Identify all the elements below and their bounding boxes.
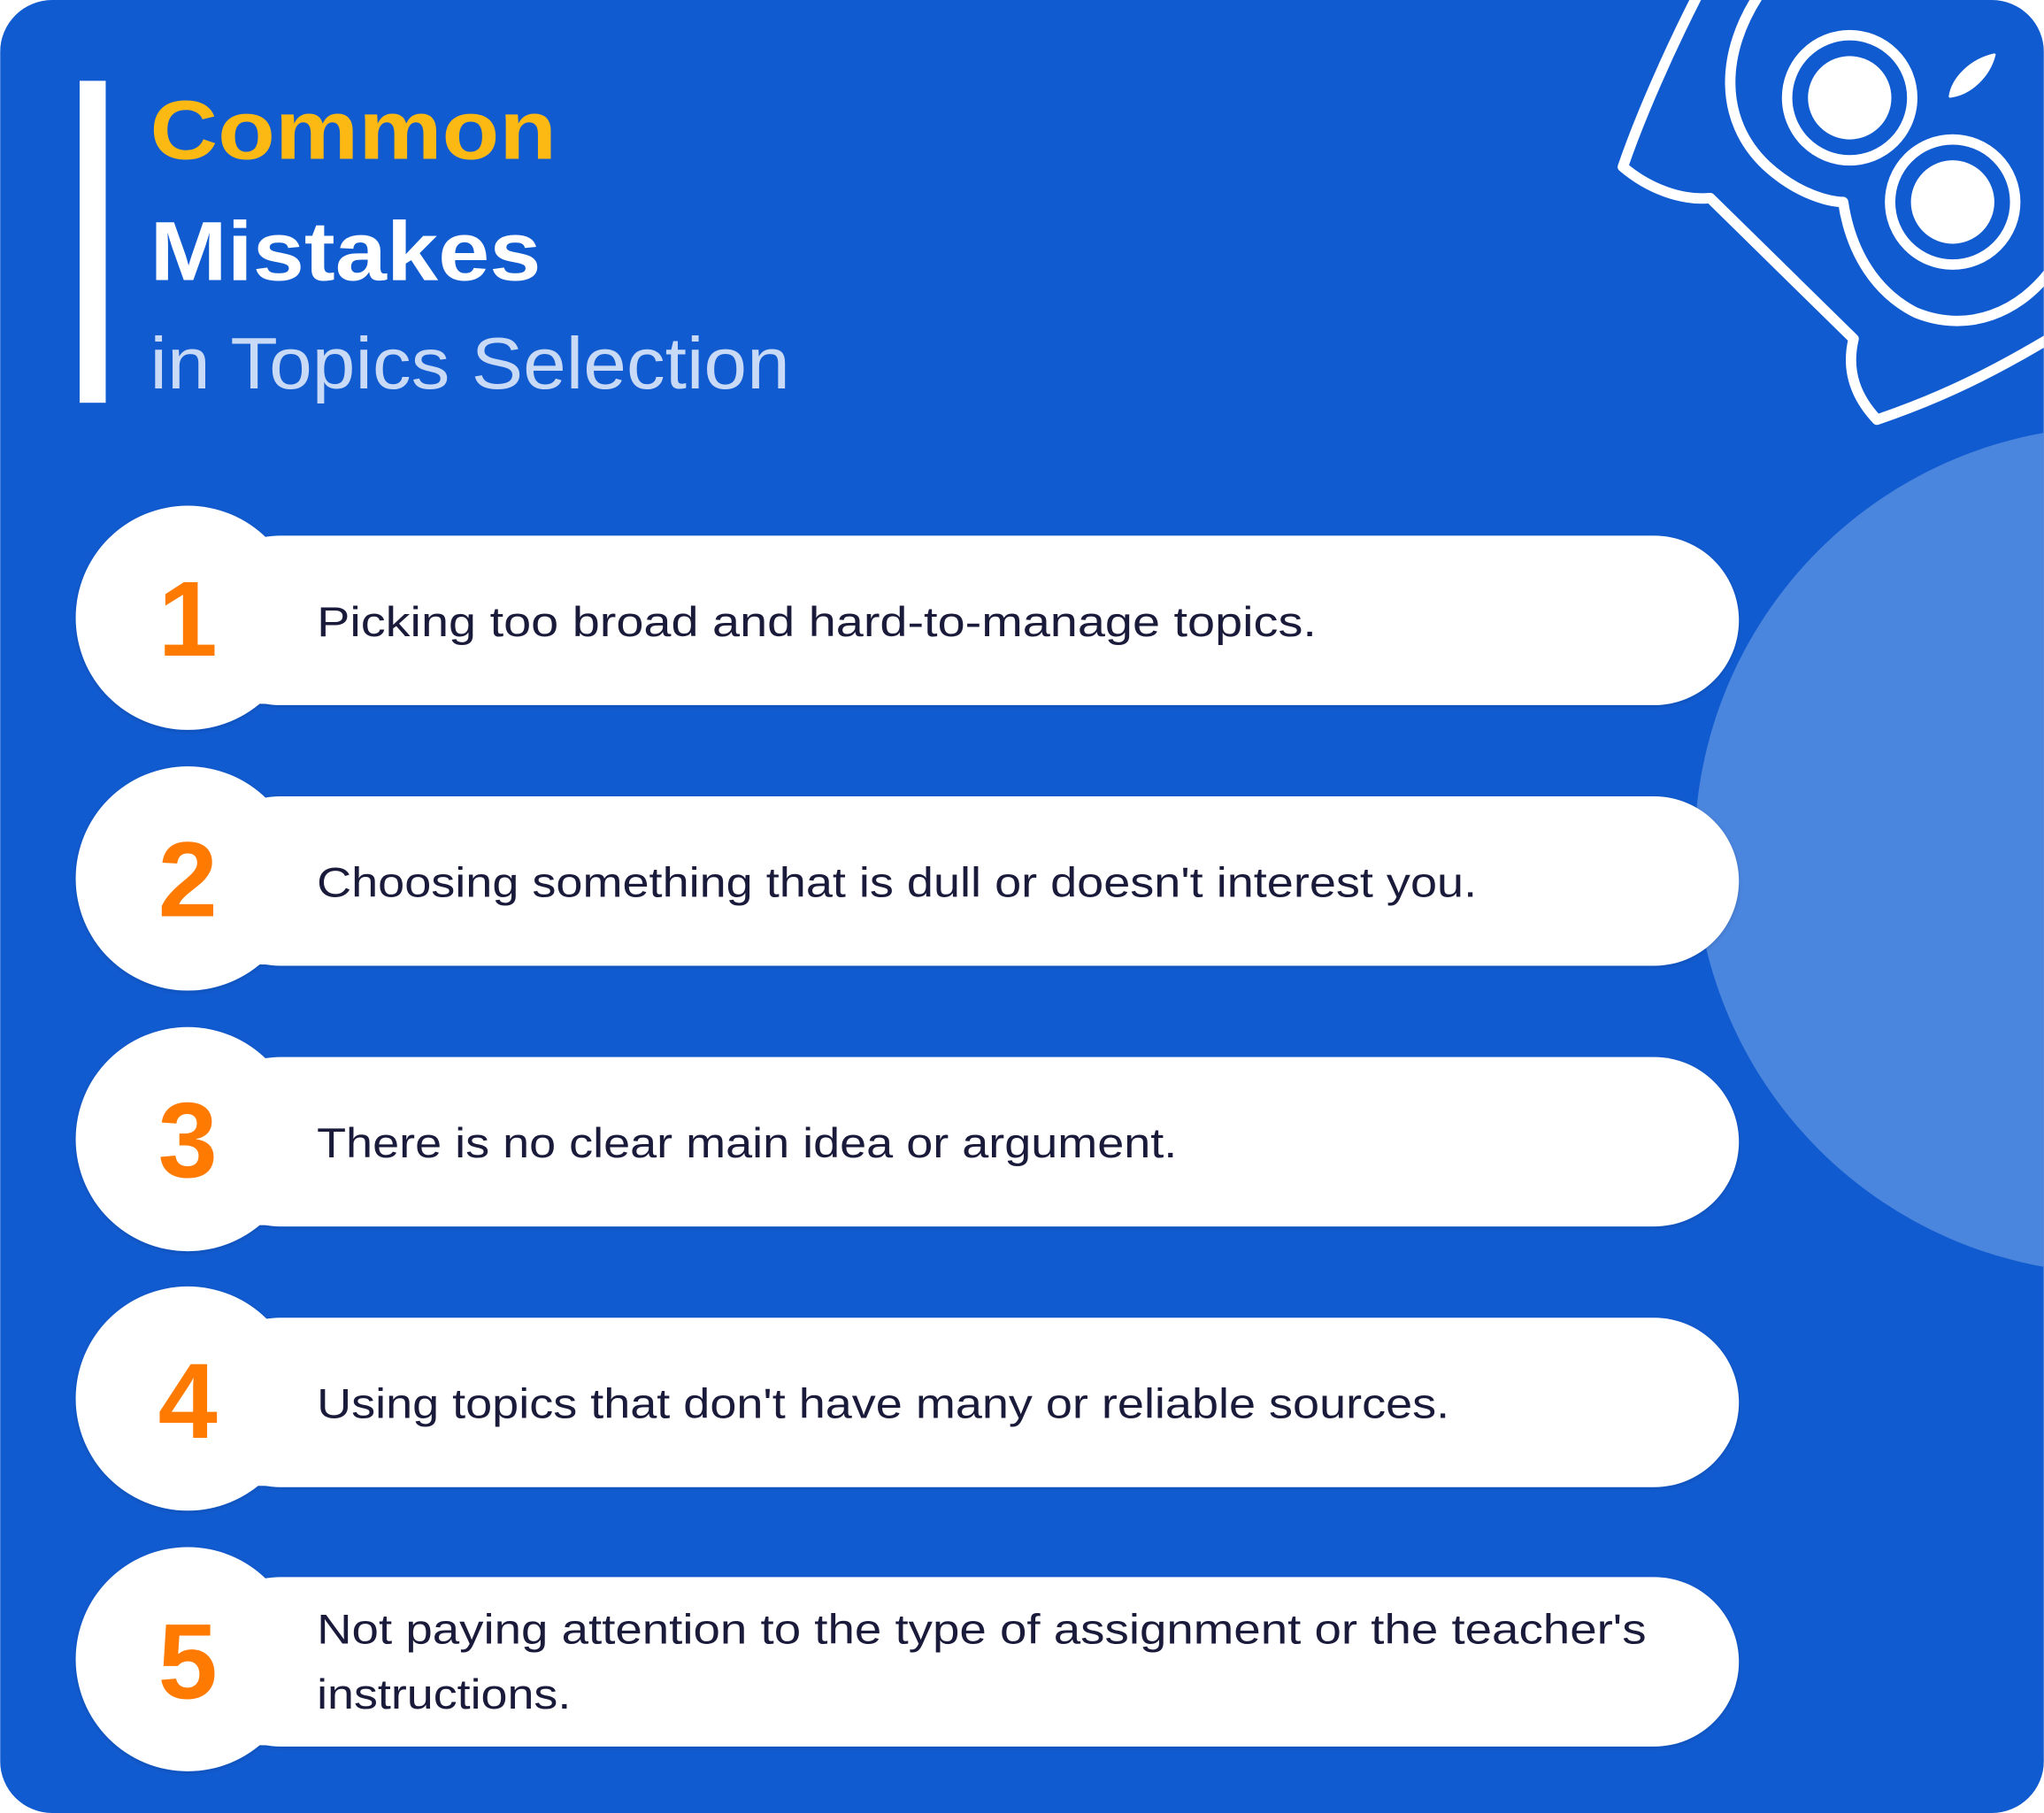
item 3: There is no clear main idea or argument. [317, 1119, 1177, 1166]
item 4: Using topics that don't have many or reliable sources. [317, 1380, 1449, 1427]
item 3: 3 [158, 1080, 218, 1200]
icon: game controller [1623, 0, 2044, 419]
item 1: 1 [158, 559, 218, 679]
decorative large circle [1694, 426, 2044, 1273]
title: in Topics Selection [150, 323, 790, 404]
item 1: Picking too broad and hard-to-manage topics. [317, 598, 1317, 645]
item 4 [76, 1287, 1739, 1510]
title: Mistakes [150, 205, 541, 298]
item 5: instructions. [317, 1671, 571, 1717]
item 5: Not paying attention to the type of assignment or the teacher's [317, 1606, 1647, 1653]
item 3 [76, 1027, 1739, 1251]
item 2: 2 [158, 820, 218, 940]
item 5: 5 [158, 1602, 218, 1721]
item 2 [76, 766, 1739, 991]
item 1 [76, 506, 1739, 730]
title [150, 84, 790, 404]
item 2: Choosing something that is dull or doesn't interest you. [317, 858, 1477, 905]
title accent bar [80, 81, 105, 403]
item 4: 4 [158, 1341, 218, 1461]
title: Common [150, 84, 557, 177]
item 5 [76, 1547, 1739, 1771]
